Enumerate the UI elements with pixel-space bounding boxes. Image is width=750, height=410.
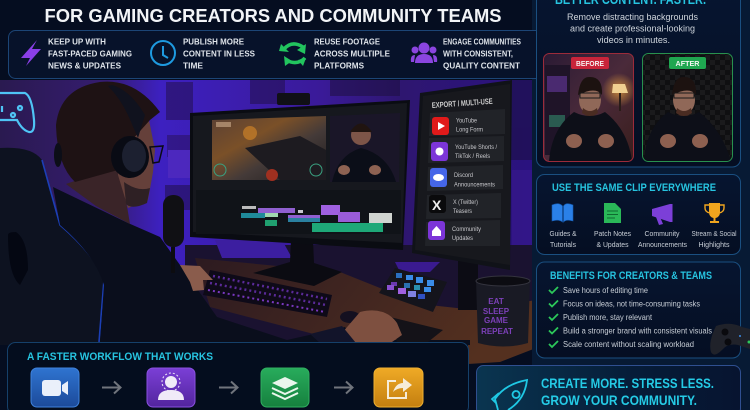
export row: community: Updates bbox=[452, 235, 474, 242]
wall shelves bbox=[165, 80, 535, 260]
export row: X bbox=[426, 193, 501, 219]
export row: Shorts: TikTok / Reels bbox=[455, 153, 491, 160]
item: community announcements: Announcements bbox=[638, 240, 687, 249]
mug: EAT bbox=[488, 297, 504, 306]
arrow bbox=[219, 382, 238, 394]
call to action text: GROW YOUR COMMUNITY. bbox=[541, 392, 697, 408]
item: community announcements: Community bbox=[644, 229, 680, 238]
face bbox=[118, 112, 155, 208]
mug bbox=[476, 276, 530, 346]
before badge bbox=[571, 57, 609, 69]
microphone bbox=[163, 195, 184, 273]
export row: Discord: Discord bbox=[454, 172, 473, 179]
item: stream highlights: Stream & Social bbox=[692, 229, 737, 238]
description: and create professional-looking bbox=[570, 24, 695, 34]
back of desk shadow bbox=[185, 245, 536, 345]
arrow bbox=[334, 382, 352, 394]
stream deck bbox=[379, 268, 447, 312]
item: patch notes: & Updates bbox=[596, 240, 629, 249]
export row: YouTube long form: Long Form bbox=[456, 126, 483, 134]
benefits list: Build a stronger brand with consistent visuals bbox=[563, 326, 712, 336]
panel: benefits bbox=[536, 262, 740, 358]
benefits list: Publish more, stay relevant bbox=[563, 313, 653, 322]
item: stream highlights bbox=[692, 203, 737, 249]
desk bbox=[195, 258, 536, 364]
export row: Shorts bbox=[428, 136, 504, 163]
hoodie bbox=[53, 187, 356, 343]
description: Remove distracting backgrounds bbox=[567, 12, 698, 22]
item: community announcements bbox=[638, 204, 687, 249]
feature: reuse footage: ACROSS MULTIPLE bbox=[314, 48, 390, 58]
item: patch notes: Patch Notes bbox=[594, 229, 631, 238]
feature: keep up: NEWS & UPDATES bbox=[48, 60, 121, 70]
main monitor bbox=[190, 93, 410, 286]
feature: engage communities: WITH CONSISTENT, bbox=[443, 48, 513, 58]
panel: call to action bbox=[476, 366, 740, 410]
export row: X: X (Twitter) bbox=[453, 199, 478, 206]
hair bbox=[56, 82, 160, 182]
item: guides: Guides & bbox=[550, 229, 576, 238]
arrow bbox=[102, 382, 120, 394]
benefits list: Save hours of editing time bbox=[563, 286, 649, 295]
panel heading: USE THE SAME CLIP EVERYWHERE bbox=[552, 182, 716, 194]
photo scene: creator at desk bbox=[0, 78, 536, 364]
neon controller bbox=[0, 93, 34, 132]
after photo bbox=[642, 54, 732, 162]
feature: publish more: TIME bbox=[183, 60, 203, 70]
export monitor bbox=[412, 80, 512, 310]
feature: publish more bbox=[151, 36, 255, 70]
mug: SLEEP bbox=[483, 307, 510, 316]
feature strip bbox=[0, 26, 548, 80]
feature: engage communities: ENGAGE COMMUNITIES bbox=[443, 36, 521, 46]
after badge: AFTER bbox=[676, 59, 700, 68]
step: remove background bbox=[147, 368, 195, 407]
panel: use the same clip everywhere bbox=[536, 174, 740, 254]
description bbox=[567, 12, 698, 45]
item: stream highlights: Highlights bbox=[698, 240, 730, 249]
export row: community bbox=[425, 220, 500, 246]
step: record bbox=[31, 368, 79, 407]
step: share bbox=[374, 368, 423, 407]
item: patch notes bbox=[594, 203, 631, 249]
mug: GAME bbox=[484, 316, 509, 325]
benefits list bbox=[549, 286, 712, 349]
headphones bbox=[54, 85, 163, 178]
before photo bbox=[544, 54, 636, 162]
feature: reuse footage: REUSE FOOTAGE bbox=[314, 36, 380, 46]
right column backdrop bbox=[532, 0, 750, 410]
lower dark body area bbox=[0, 340, 470, 345]
hand on keyboard bbox=[180, 265, 213, 291]
feature: reuse footage bbox=[279, 36, 390, 70]
feature: keep up bbox=[21, 36, 132, 70]
icon: rocket bbox=[492, 380, 527, 410]
export row: Shorts: YouTube Shorts / bbox=[455, 144, 497, 151]
benefits heading: BENEFITS FOR CREATORS & TEAMS bbox=[550, 270, 712, 282]
item: guides bbox=[550, 204, 576, 249]
export row: YouTube long form: YouTube bbox=[456, 118, 477, 124]
export row: community: Community bbox=[452, 226, 482, 233]
export row: Discord bbox=[427, 165, 503, 191]
feature: reuse footage: PLATFORMS bbox=[314, 60, 364, 70]
mug: REPEAT bbox=[481, 327, 513, 336]
export row: Discord: Announcements bbox=[454, 182, 496, 188]
neck bbox=[66, 165, 130, 224]
after badge bbox=[669, 57, 706, 69]
benefits list: Focus on ideas, not time-consuming tasks bbox=[563, 300, 700, 308]
description: videos in minutes. bbox=[597, 35, 670, 45]
title: FOR GAMING CREATORS AND COMMUNITY TEAMS bbox=[44, 6, 501, 26]
call to action text bbox=[541, 375, 714, 408]
call to action text: CREATE MORE. STRESS LESS. bbox=[541, 375, 714, 391]
export row: X: Teasers bbox=[453, 208, 473, 215]
export row: X: X bbox=[432, 197, 442, 213]
feature: keep up: KEEP UP WITH bbox=[48, 36, 106, 46]
chair back bbox=[0, 148, 104, 345]
feature: engage communities: QUALITY CONTENT bbox=[443, 60, 521, 70]
before badge: BEFORE bbox=[576, 59, 604, 68]
panel: workflow bbox=[8, 342, 468, 410]
keyboard bbox=[203, 270, 332, 317]
mouse pad and hand bbox=[310, 310, 443, 343]
benefits list: Scale content without scaling workload bbox=[563, 340, 694, 349]
panel: better content faster bbox=[536, 0, 740, 167]
export row: YouTube long form bbox=[429, 109, 505, 136]
feature: publish more: CONTENT IN LESS bbox=[183, 48, 255, 58]
item: guides: Tutorials bbox=[550, 240, 576, 249]
feature: publish more: PUBLISH MORE bbox=[183, 36, 244, 46]
feature: keep up: FAST-PACED GAMING bbox=[48, 48, 132, 58]
export monitor: EXPORT / MULTI-USE bbox=[432, 97, 493, 110]
workflow heading: A FASTER WORKFLOW THAT WORKS bbox=[27, 351, 213, 363]
icon: game controller bbox=[710, 324, 750, 355]
step: layers bbox=[261, 368, 309, 407]
feature: engage communities bbox=[411, 36, 521, 70]
